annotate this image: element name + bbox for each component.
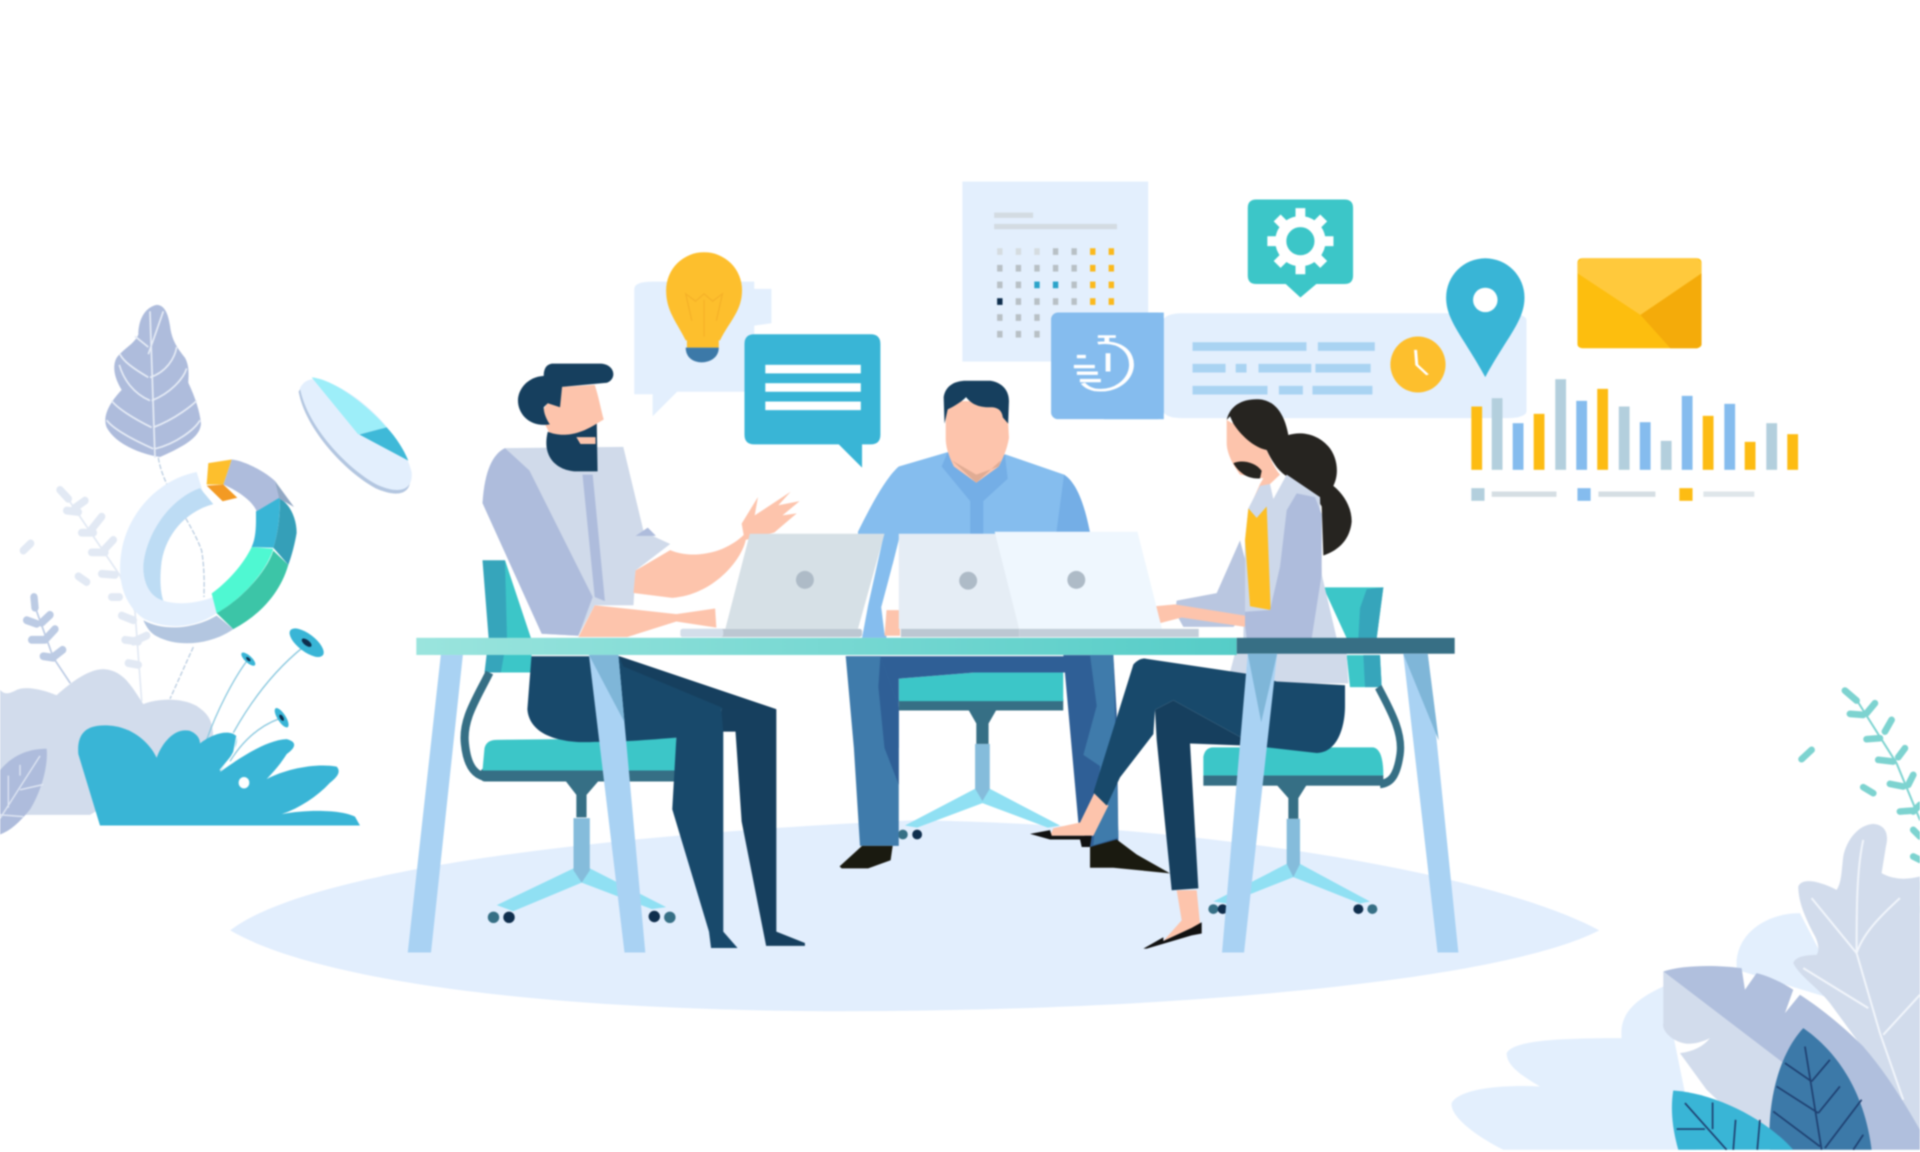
envelope [1577, 258, 1702, 348]
grey bush [0, 669, 213, 815]
left man trousers [527, 656, 805, 948]
table [408, 638, 1458, 952]
floor ellipse [230, 820, 1599, 1011]
table top [416, 638, 1455, 655]
schedule card [1051, 313, 1526, 419]
left person with chair [465, 364, 805, 948]
middle person with chair [840, 381, 1105, 868]
left man arms [578, 492, 800, 637]
teal sprig [1802, 691, 1920, 910]
left leaf [0, 749, 47, 834]
left man torso [482, 447, 670, 636]
laptop left [680, 534, 884, 637]
woman yellow top [1245, 507, 1271, 610]
woman [1030, 399, 1352, 949]
location pin [1446, 258, 1524, 377]
top leaf [105, 305, 201, 458]
light bulb idea [634, 252, 771, 416]
laptop right [995, 532, 1199, 637]
chart legend [1471, 488, 1754, 501]
light sprig [23, 490, 147, 701]
chat bubble [744, 334, 880, 468]
table legs [408, 654, 1458, 952]
left plants [0, 305, 412, 834]
middle man right leg [1063, 655, 1170, 873]
blue bush [78, 725, 360, 826]
pie disc [299, 377, 412, 494]
upper blob [1737, 913, 1847, 1003]
woman face [1227, 420, 1280, 518]
middle man head [944, 381, 1009, 483]
calendar [962, 182, 1148, 362]
woman jacket [1155, 475, 1337, 638]
blue-grey sprig [27, 597, 70, 683]
dark blue leaf [1769, 1028, 1872, 1150]
dashed stems [158, 458, 204, 699]
right plants [1452, 691, 1920, 1150]
laptop middle [899, 534, 1019, 637]
settings gear bubble [1248, 200, 1353, 297]
woman hair [1227, 399, 1352, 555]
lower blob [1452, 986, 1697, 1150]
right shoe [1090, 839, 1170, 873]
middle man torso [858, 452, 1091, 638]
left man head [518, 364, 613, 471]
bar chart [1471, 379, 1798, 501]
left chair [465, 560, 680, 923]
woman legs [1030, 653, 1348, 949]
stopwatch [1074, 337, 1132, 390]
pale oak leaf [1793, 824, 1920, 1136]
flowers [207, 623, 328, 761]
middle man trousers [846, 656, 1105, 846]
laptops [680, 532, 1199, 637]
big split leaf [1663, 966, 1920, 1150]
right chair [1203, 587, 1401, 914]
calendar and schedule card [962, 182, 1798, 501]
cyan leaf [1672, 1090, 1793, 1150]
middle man shoe [840, 846, 893, 868]
middle chair [898, 673, 1063, 839]
donut chart [120, 460, 297, 643]
